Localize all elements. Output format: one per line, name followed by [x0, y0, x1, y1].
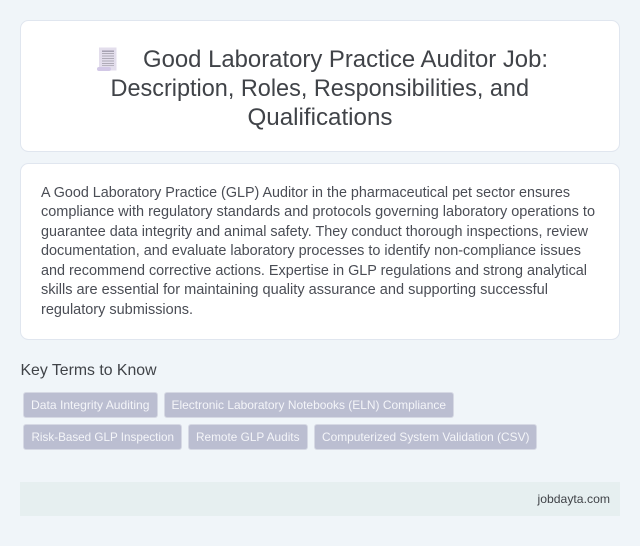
chip: remote GLP audits: Remote GLP Audits — [196, 430, 300, 444]
text block: description: A Good Laboratory Practice (GLP) Auditor in the pharmaceutical pet sector ensures — [41, 185, 570, 201]
footer source text: jobdayta.com — [536, 492, 610, 506]
chip: electronic laboratory notebooks: Electronic Laboratory Notebooks (ELN) Compliance — [172, 398, 446, 412]
footer bar — [20, 482, 620, 516]
text block: description: compliance with regulatory standards and protocols governing laboratory operations to — [41, 204, 595, 220]
chip: risk-based GLP inspection: Risk-Based GLP Inspection — [32, 430, 174, 444]
text block: description: regulatory submissions. — [41, 302, 193, 318]
chips: key terms — [24, 392, 536, 450]
panel: description — [20, 164, 620, 340]
chip: data integrity auditing — [24, 392, 158, 418]
text block: description: documentation, and evaluate laboratory processes to identify non-compliance issues — [41, 243, 581, 259]
title: Good Laboratory Practice Auditor Job: — [143, 46, 548, 73]
text block: description: skills are essential for maintaining quality assurance and supporting successful — [41, 282, 548, 298]
chip: computerized system validation: Computerized System Validation (CSV) — [322, 430, 530, 444]
title: Qualifications — [248, 104, 392, 131]
icon: document scroll — [97, 48, 116, 71]
title: Description, Roles, Responsibilities, and — [110, 75, 529, 102]
heading: key terms: Key Terms to Know — [20, 362, 157, 379]
chip: data integrity auditing: Data Integrity Auditing — [31, 398, 150, 412]
chip: risk-based GLP inspection — [24, 424, 182, 450]
text block: description — [41, 185, 595, 318]
text block: description: guarantee data integrity and animal safety. They conduct thorough inspections, review — [41, 224, 589, 240]
chip: electronic laboratory notebooks — [164, 392, 454, 418]
title — [110, 46, 548, 131]
panel: title card — [20, 20, 620, 152]
chip: computerized system validation — [314, 424, 536, 450]
text block: description: and recommend corrective actions. Expertise in GLP regulations and strong analytical — [41, 263, 587, 279]
chip: remote GLP audits — [188, 424, 308, 450]
